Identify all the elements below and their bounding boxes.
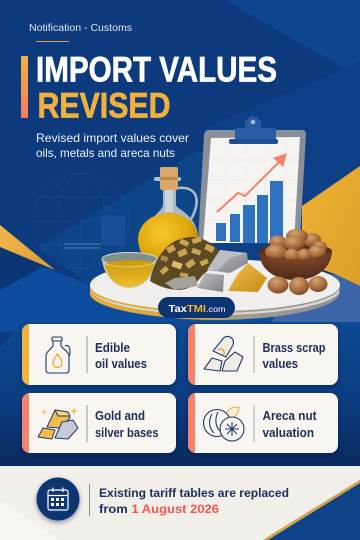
subtitle: Revised import values cover	[36, 131, 189, 145]
illustration: platform	[90, 259, 340, 320]
gold polygon right	[302, 166, 360, 286]
label	[262, 408, 317, 440]
footer band	[0, 466, 360, 540]
divider	[254, 336, 255, 373]
label	[262, 340, 326, 371]
title: IMPORT VALUES	[36, 50, 277, 90]
brand badge	[158, 297, 235, 318]
icon: brass scrap	[204, 336, 243, 371]
label: oil values	[95, 356, 147, 371]
illustration: metal bars	[197, 250, 267, 292]
brand badge: TaxTMI.com	[168, 303, 226, 315]
label: silver bases	[95, 425, 158, 440]
card: brass scrap	[188, 324, 338, 385]
eyebrow label: Notification - Customs	[29, 23, 132, 34]
icon: calendar badge	[36, 478, 80, 520]
eyebrow rule	[36, 41, 69, 42]
bar chart	[216, 181, 283, 243]
clipboard clip	[229, 116, 278, 144]
lower panel background	[0, 322, 360, 466]
illustration: clipboard chart	[198, 116, 306, 243]
label	[95, 408, 158, 440]
label: Brass scrap	[262, 340, 326, 355]
subtitle: oils, metals and areca nuts	[36, 146, 175, 160]
illustration: bowl of areca nuts	[259, 229, 332, 295]
label: Edible	[95, 340, 130, 355]
card: edible oil	[22, 324, 176, 385]
title	[36, 50, 277, 126]
label: Gold and	[95, 408, 145, 423]
card: areca nut	[188, 393, 338, 453]
footer text	[99, 486, 289, 516]
illustration: brass scrap pile	[150, 236, 219, 290]
illustration: glass bowl of oil	[102, 252, 157, 288]
icon: oil jug	[46, 337, 70, 373]
divider	[86, 336, 88, 373]
footer divider	[89, 484, 90, 516]
subtitle	[36, 131, 189, 160]
title: REVISED	[38, 86, 170, 126]
background globe and document watermark	[33, 173, 129, 269]
label	[95, 340, 147, 371]
label: Areca nut	[262, 408, 317, 423]
footer text: from 1 August 2026	[99, 502, 219, 516]
divider	[254, 405, 255, 442]
trend arrow	[217, 154, 286, 212]
icon: gold and silver bars	[38, 407, 78, 439]
title accent bar	[21, 56, 28, 118]
footer text: Existing tariff tables are replaced	[99, 486, 289, 500]
divider	[86, 405, 88, 442]
icon: areca nut	[204, 407, 244, 441]
label: valuation	[262, 425, 314, 440]
illustration: oil bottle	[138, 167, 198, 268]
label: values	[262, 356, 298, 371]
card: gold and silver	[22, 393, 176, 453]
